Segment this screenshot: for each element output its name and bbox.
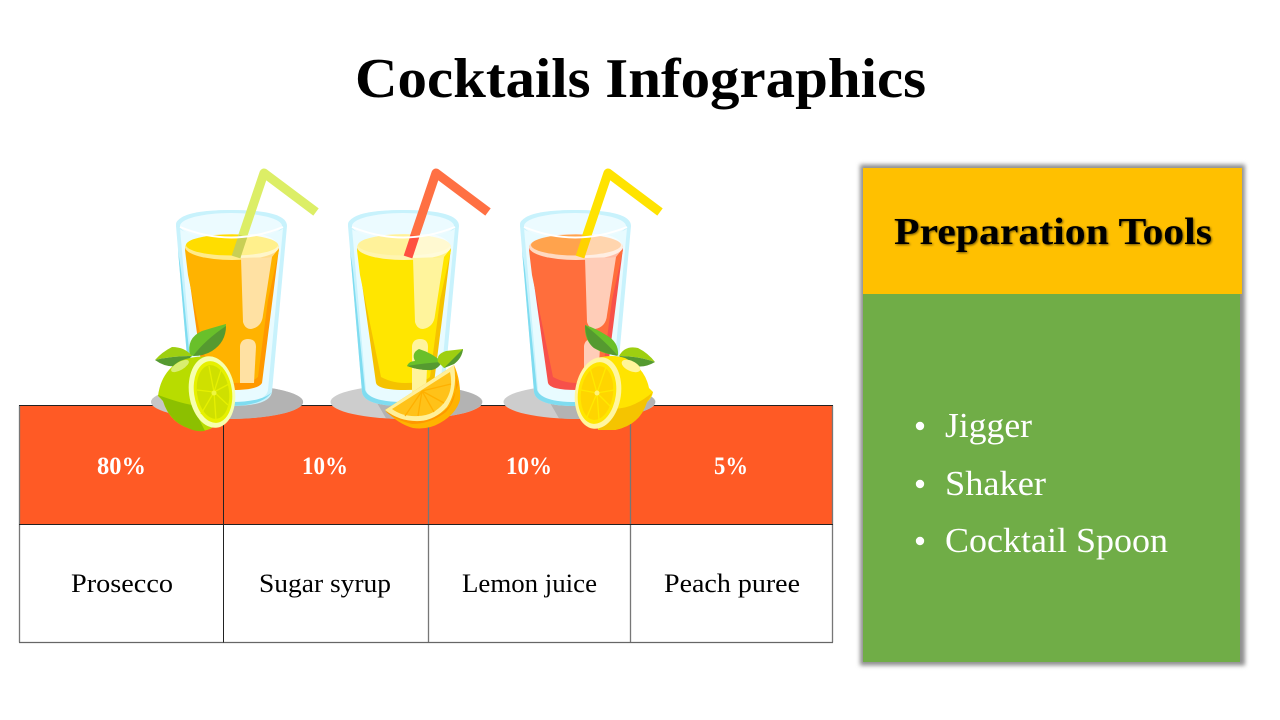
- list item: jigger: Jigger: [945, 406, 1032, 445]
- glass shadow: [151, 385, 303, 419]
- straw: [408, 173, 488, 257]
- glass shadow: [330, 385, 482, 419]
- icon: lemonade glass with orange slice: [330, 173, 488, 428]
- straw: [580, 173, 660, 257]
- panel: preparation tools: [860, 164, 1245, 666]
- percentage: sugar syrup: 10%: [302, 453, 348, 480]
- panel body background: [863, 294, 1240, 662]
- juice: [185, 248, 279, 390]
- table header row: [20, 406, 832, 524]
- table ingredient row: [71, 569, 800, 598]
- straw: [236, 173, 316, 257]
- ingredient: lemon juice: Lemon juice: [462, 569, 597, 598]
- glass shadow: [504, 385, 656, 419]
- panel shadow: [860, 164, 1245, 666]
- icon: orange juice glass with lime: [151, 173, 316, 431]
- panel: ingredients table: [19, 406, 833, 642]
- percentage: prosecco: 80%: [97, 453, 146, 480]
- panel header background: [863, 168, 1242, 294]
- ingredient: prosecco: Prosecco: [71, 569, 173, 598]
- panel heading: Preparation Tools: [894, 211, 1212, 253]
- ingredient: peach puree: Peach puree: [664, 569, 800, 598]
- ingredient: sugar syrup: Sugar syrup: [259, 569, 391, 598]
- percentage: lemon juice: 10%: [506, 453, 552, 480]
- icon: lime with leaves: [155, 324, 240, 431]
- glass: [520, 210, 631, 406]
- glass: [348, 210, 459, 406]
- juice: [529, 248, 623, 390]
- bullet list: [916, 406, 1168, 560]
- percentage: peach puree: 5%: [714, 453, 748, 480]
- list item: cocktail spoon: Cocktail Spoon: [945, 521, 1168, 560]
- icon: lemon with leaves: [570, 325, 655, 432]
- title: Cocktails Infographics: [355, 48, 926, 110]
- glass: [176, 210, 287, 406]
- juice: [357, 248, 451, 390]
- icon: peach juice glass with lemon: [504, 173, 660, 432]
- list item: shaker: Shaker: [945, 464, 1046, 503]
- icon: orange slice with leaves: [385, 349, 463, 428]
